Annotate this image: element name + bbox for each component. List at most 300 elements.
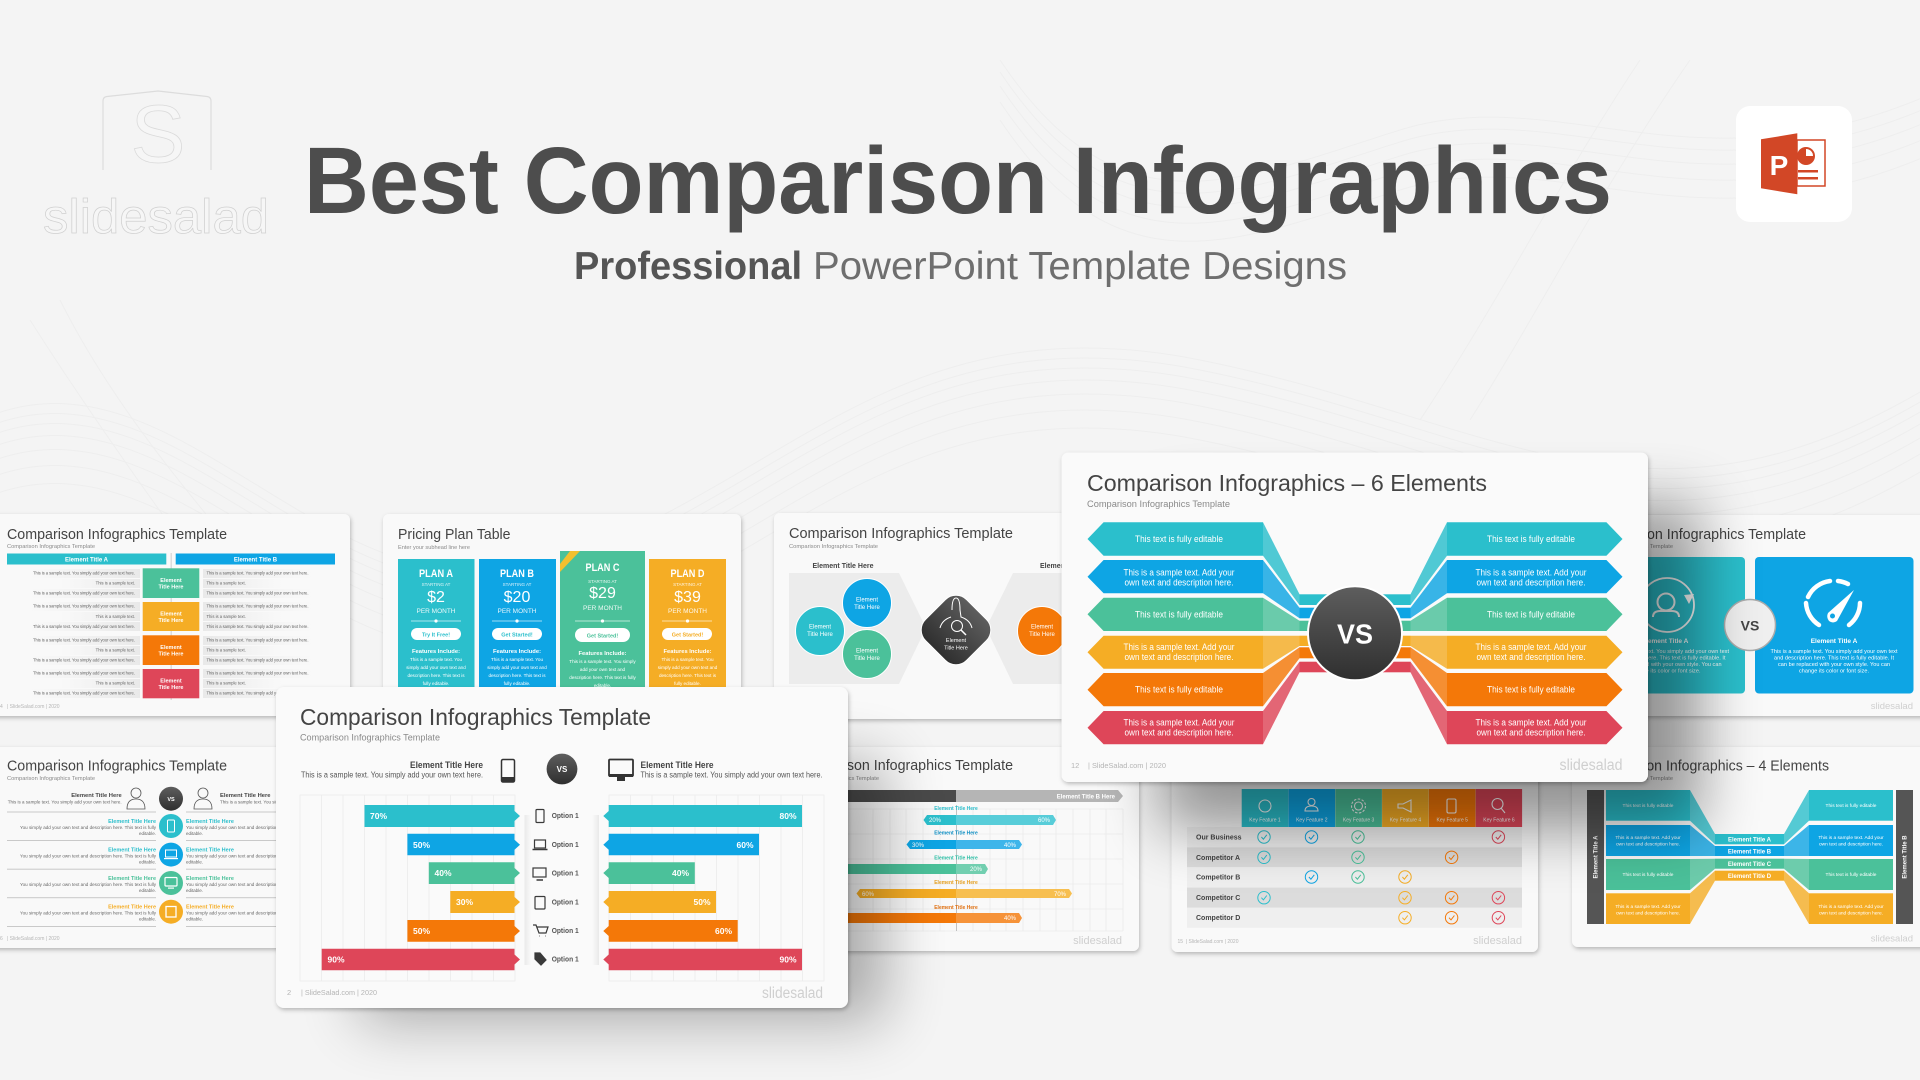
row 4: editable.	[186, 916, 203, 922]
row 1: You simply add your own text and description here. This text is fully	[20, 825, 157, 830]
plan A: Features Include:	[412, 649, 460, 655]
left ribbon text: This text is fully editable	[1135, 534, 1223, 544]
left bars: 30%	[456, 897, 473, 907]
plan B: PLAN B	[500, 568, 534, 580]
VS circle: VS	[1741, 618, 1759, 634]
VS circle: VS	[1337, 618, 1373, 650]
right header	[640, 760, 822, 780]
plan C: $29	[589, 585, 616, 602]
row labels: Competitor A	[1196, 855, 1240, 862]
plan A	[398, 559, 474, 689]
header row: Element Title Here	[220, 793, 271, 799]
center colored boxes: Element	[160, 678, 182, 684]
panel: main bar comparison slide: Comparison Infographics Template	[300, 732, 440, 742]
right text rows: This is a sample text. You simply add your own text here.	[206, 570, 308, 576]
header row: This is a sample text. You simply add your own text here.	[8, 800, 122, 804]
icon: PowerPoint badge: P	[1770, 150, 1788, 181]
row 1: Element Title Here	[186, 819, 234, 825]
shadow of 6 elements slide	[1160, 505, 1700, 830]
right ribbon text: This is a sample text. Add your	[1476, 642, 1586, 652]
right bars: 90%	[779, 954, 797, 964]
column headers: Element Title B	[234, 558, 278, 564]
plan D: This is a sample text. You	[661, 657, 714, 662]
left text rows: This is a sample text. You simply add your own text here.	[33, 590, 135, 596]
row 3: editable.	[139, 888, 156, 893]
plan B: Features Include:	[493, 649, 541, 655]
blue card: change its color or font size.	[1799, 668, 1869, 674]
column headers: Element Title A	[65, 558, 109, 564]
right ribbon text: own text and description here.	[1476, 578, 1586, 588]
row labels	[1196, 834, 1242, 922]
panel: hexagon comparison slide: Element	[809, 624, 831, 630]
right header: This is a sample text. You simply add your own text here.	[640, 770, 822, 780]
bars: Element Title Here	[934, 830, 978, 836]
plan D: Features Include:	[664, 649, 712, 655]
logo: slidesalad	[1560, 757, 1622, 774]
row 2	[20, 843, 323, 867]
row 3: Element Title Here	[186, 876, 234, 882]
panel: hexagon comparison slide: Element	[856, 598, 878, 604]
header row: Element Title Here	[71, 793, 122, 799]
left ribbon text: This is a sample text. Add your	[1124, 718, 1234, 728]
right text rows: This is a sample text. You simply add your own text here.	[206, 658, 308, 662]
row highlights	[30, 569, 313, 698]
title: Best Comparison Infographics	[304, 128, 1612, 234]
plan C: description here. This text is fully	[569, 675, 636, 680]
panel: 6 elements VS slide: | SlideSalad.com | 2020	[1088, 761, 1166, 770]
bars: 70%	[1054, 892, 1067, 898]
ribbon text: own text and description here.	[1616, 842, 1680, 848]
left ribbon text: own text and description here.	[1124, 728, 1234, 738]
plan C	[560, 551, 645, 689]
row labels: Competitor C	[1196, 895, 1240, 902]
panel: timeline bars slide	[700, 747, 1139, 951]
VS circle	[1724, 600, 1776, 650]
center colored boxes: Title Here	[159, 618, 183, 624]
table header: Key Feature 3	[1343, 818, 1375, 824]
plan D: fully editable.	[674, 681, 701, 686]
ribbon text: This text is fully editable	[1623, 872, 1674, 878]
column headers	[7, 554, 335, 564]
ribbon text: This text is fully editable	[1826, 872, 1877, 878]
row 2: editable.	[186, 860, 203, 864]
bars: Element Title Here	[934, 880, 978, 886]
row 1	[20, 814, 323, 838]
dark diamond with person icon: Title Here	[944, 646, 968, 652]
center bands	[1300, 594, 1410, 672]
ribbon text: This is a sample text. Add your	[1818, 835, 1884, 841]
panel: comparison list slide, bottom left: Comparison Infographics Template	[7, 776, 95, 782]
right ribbon text: own text and description here.	[1476, 652, 1586, 662]
right text rows: This is a sample text. You simply add your own text here.	[206, 670, 308, 676]
row 2: Element Title Here	[186, 848, 234, 854]
table header: Key Feature 4	[1390, 818, 1421, 824]
panel: hexagon comparison slide: Element Title Here	[1040, 563, 1101, 570]
row 2: editable.	[139, 860, 156, 864]
panel: hexagon comparison slide: Title Here	[854, 656, 881, 662]
center colored boxes: Title Here	[159, 652, 183, 658]
panel: element table slide, top left	[0, 514, 350, 716]
right ribbon text: This text is fully editable	[1487, 610, 1575, 620]
panel: main bar comparison slide	[276, 687, 848, 1008]
plan B: simply add your own text and	[487, 665, 547, 670]
panel: hexagon comparison slide: Comparison Infographics Template	[789, 544, 878, 550]
bars: 40%	[1004, 916, 1017, 922]
icon: gauge	[1806, 581, 1860, 625]
center colored boxes: Element	[160, 645, 182, 651]
panel: 6 elements VS slide: Comparison Infographics Template	[1087, 499, 1230, 509]
blue card: Element Title A	[1811, 638, 1858, 645]
header row: This is a sample text. You simply add your own text here.	[220, 800, 333, 804]
left text rows: This is a sample text.	[96, 648, 135, 652]
heading: Comparison Infographics Template	[789, 526, 1013, 542]
row 2: You simply add your own text and description here. This text is fully	[186, 854, 323, 858]
left text rows: This is a sample text. You simply add your own text here.	[33, 624, 135, 629]
plan C: PLAN C	[586, 562, 620, 574]
plan C: editable.	[594, 683, 611, 688]
ribbon text: This is a sample text. Add your	[1818, 904, 1884, 910]
left text rows: This is a sample text. You simply add your own text here.	[33, 570, 135, 576]
option labels: Option 1	[552, 840, 579, 849]
bars	[800, 806, 1072, 923]
right text rows	[206, 570, 308, 696]
plan C: PER MONTH	[583, 605, 622, 612]
icon: PowerPoint badge	[1736, 106, 1852, 222]
ribbons	[1606, 790, 1893, 924]
option labels: Option 1	[552, 926, 579, 935]
right bars	[603, 805, 802, 970]
option icons	[532, 810, 548, 965]
wordmark: slidesalad	[43, 191, 269, 244]
circles	[796, 578, 1066, 678]
row 1: editable.	[186, 831, 203, 836]
bars: 60%	[1038, 818, 1051, 824]
left bars: 50%	[413, 926, 430, 936]
icon: monitor	[609, 760, 633, 781]
plan A: $2	[427, 589, 445, 606]
footer: 15 | SlideSalad.com | 2020	[1178, 939, 1239, 945]
left ribbon text: This is a sample text. Add your	[1124, 568, 1234, 578]
ribbon text: own text and description here.	[1819, 910, 1883, 916]
panel: main bar comparison slide: | SlideSalad.com | 2020	[301, 988, 377, 997]
left bars: 50%	[413, 840, 430, 850]
left ribbon text	[1124, 534, 1234, 738]
left header: Element Title Here	[410, 760, 483, 770]
left text rows: This is a sample text. You simply add your own text here.	[33, 604, 135, 608]
icon: shield with S: S	[131, 89, 185, 180]
side bars: Element Title A	[1594, 835, 1600, 879]
row labels: Competitor D	[1196, 915, 1240, 922]
plan D	[649, 559, 726, 689]
chart grids	[300, 795, 824, 981]
plan D: STARTING AT	[673, 582, 702, 587]
ribbon text: This text is fully editable	[1623, 803, 1674, 809]
VS circle	[1308, 586, 1402, 680]
VS circle	[547, 754, 577, 784]
panel: hexagon comparison slide: Title Here	[1029, 632, 1056, 638]
plan A: PER MONTH	[416, 608, 456, 615]
footer: 12	[1071, 761, 1079, 770]
grid	[848, 809, 1123, 931]
bars: Element Title Here	[934, 905, 978, 911]
icon: phone	[502, 760, 514, 782]
row 4: editable.	[139, 916, 156, 922]
row 1: You simply add your own text and description here. This text is fully	[186, 825, 323, 830]
plan A: description here. This text is	[407, 673, 465, 678]
connector wedges left	[1263, 522, 1300, 744]
plan A: This is a sample text. You	[410, 657, 462, 662]
right bars: 50%	[693, 897, 711, 907]
left ribbon text: This text is fully editable	[1135, 610, 1223, 620]
panel: hexagon comparison slide: Element Title Here	[813, 563, 874, 570]
right bars: 60%	[715, 926, 732, 936]
footer: 2	[287, 988, 291, 997]
panel: hexagon comparison slide: Title Here	[807, 632, 834, 638]
row 2: You simply add your own text and description here. This text is fully	[20, 854, 157, 858]
right ribbon text: This is a sample text. Add your	[1476, 568, 1586, 578]
row 4: Element Title Here	[108, 904, 156, 910]
left header	[301, 760, 483, 780]
plan D: Get Started!	[672, 632, 703, 638]
ribbon text: This is a sample text. Add your	[1615, 835, 1681, 841]
option labels: Option 1	[552, 954, 579, 964]
option labels: Option 1	[552, 811, 579, 820]
plan B: description here. This text is	[488, 673, 546, 678]
ribbon text	[1615, 803, 1884, 916]
ribbon text: This is a sample text. Add your	[1615, 904, 1681, 910]
right text rows: This is a sample text.	[206, 580, 246, 586]
panel: timeline bars slide: Comparison Infographics Template	[791, 776, 879, 782]
table header: Key Feature 2	[1296, 818, 1328, 824]
right text rows: This is a sample text. You simply add your own text here.	[206, 690, 308, 696]
row labels: Our Business	[1196, 834, 1242, 842]
left ribbons	[1088, 522, 1263, 744]
heading: Comparison Infographics – 4 Elements	[1586, 759, 1829, 775]
plan B	[479, 559, 556, 689]
row 1: Element Title Here	[108, 819, 156, 825]
bars: 60%	[862, 892, 875, 898]
plan B: STARTING AT	[503, 582, 532, 587]
grey hexagons	[789, 573, 1100, 684]
row 3	[20, 871, 323, 895]
plan B: PER MONTH	[498, 608, 537, 615]
panel: hexagon comparison slide	[774, 513, 1114, 719]
right ribbon text: own text and description here.	[1476, 728, 1586, 738]
side bars	[1587, 790, 1913, 924]
heading: Comparison Infographics Template	[7, 527, 227, 543]
row 3: You simply add your own text and description here. This text is fully	[20, 882, 157, 887]
footer: 4 | SlideSalad.com | 2020	[0, 704, 60, 710]
panel: feature table slide	[1172, 600, 1538, 952]
heading: Pricing Plan Table	[398, 527, 510, 543]
option labels: Option 1	[552, 898, 579, 906]
left header: This is a sample text. You simply add your own text here.	[301, 770, 483, 780]
divider lines	[7, 812, 286, 927]
row 1: editable.	[139, 831, 156, 836]
plan B: $20	[504, 589, 530, 606]
right ribbon text: This is a sample text. Add your	[1476, 718, 1586, 728]
plan D: PLAN D	[670, 568, 705, 580]
left bars: 70%	[370, 811, 387, 821]
ribbon text: Element Title B	[1728, 850, 1772, 856]
panel: hexagon comparison slide: Element	[856, 648, 878, 654]
panel: VS cards slide, top right: Comparison Infographics Template	[1585, 544, 1673, 550]
row 3: You simply add your own text and description here. This text is fully	[186, 882, 323, 887]
logo: slidesalad	[1871, 701, 1913, 712]
heading: Comparison Infographics Template	[1586, 527, 1806, 543]
plan C: This is a sample text. You simply	[569, 659, 636, 664]
table rows	[1187, 827, 1522, 928]
center column shading	[524, 815, 599, 965]
left bars	[322, 805, 520, 970]
left text rows: This is a sample text.	[96, 614, 135, 619]
plan B: This is a sample text. You	[491, 657, 543, 662]
bars: 30%	[912, 843, 925, 849]
teal card	[1587, 557, 1745, 694]
heading: Comparison Infographics Template	[300, 704, 651, 730]
plan C: Get Started!	[587, 634, 618, 640]
teal card: Element Title A	[1642, 638, 1689, 645]
right bars: 60%	[736, 840, 754, 850]
left ribbon text: own text and description here.	[1124, 652, 1234, 662]
center colored boxes: Element	[160, 612, 182, 618]
ribbon text: This text is fully editable	[1826, 803, 1877, 809]
right ribbon text	[1476, 534, 1586, 738]
header bar: Element Title B Here	[1057, 794, 1116, 800]
side bars: Element Title B	[1902, 835, 1908, 879]
center colored boxes: Element	[160, 578, 182, 584]
plan D: PER MONTH	[668, 608, 707, 615]
teal card: can be replaced with your own style. You can	[1610, 662, 1722, 668]
plan A: STARTING AT	[422, 582, 451, 587]
right text rows: This is a sample text. You simply add your own text here.	[206, 604, 308, 608]
row 4: Element Title Here	[186, 904, 234, 910]
panel: comparison list slide, bottom left	[0, 747, 333, 948]
left text rows: This is a sample text. You simply add your own text here.	[33, 690, 135, 696]
header row: VS	[167, 797, 175, 803]
panel: hexagon comparison slide: Title Here	[854, 605, 881, 611]
logo: slidesalad	[1871, 934, 1913, 945]
teal card: change its color or font size.	[1630, 668, 1701, 674]
ribbon text: Element Title C	[1728, 862, 1772, 868]
teal card: This is a sample text. You simply add your own text	[1602, 649, 1729, 655]
logo: slidesalad	[762, 985, 823, 1002]
row 3: Element Title Here	[108, 876, 156, 882]
row 4: You simply add your own text and description here. This text is fully	[20, 910, 157, 916]
subtitle: PowerPoint Template Designs	[813, 245, 1347, 288]
row 4: You simply add your own text and description here. This text is fully	[186, 910, 323, 916]
left ribbon text: This is a sample text. Add your	[1124, 642, 1234, 652]
teal card: and description here. This text is fully editable. It	[1606, 656, 1726, 662]
panel: element table slide, top left: Comparison Infographics Template	[7, 544, 95, 550]
bars: Element Title Here	[934, 806, 978, 812]
plan B: fully editable.	[504, 681, 530, 686]
left text rows: This is a sample text.	[96, 580, 135, 586]
plan A: Try It Free!	[422, 632, 450, 638]
left text rows	[33, 570, 135, 696]
left text rows: This is a sample text. You simply add your own text here.	[33, 658, 135, 662]
center colored boxes: Title Here	[159, 685, 183, 691]
check marks	[1258, 831, 1505, 924]
panel: 6 elements VS slide	[1062, 452, 1648, 782]
bars: 20%	[929, 818, 942, 824]
plan A: simply add your own text and	[406, 665, 466, 670]
right text rows: This is a sample text. You simply add your own text here.	[206, 624, 308, 629]
bars: 20%	[970, 867, 983, 873]
table header: Key Feature 6	[1483, 818, 1515, 824]
blue card: and description here. This text is fully editable. It	[1774, 656, 1894, 662]
heading: Comparison Infographics – 6 Elements	[1087, 470, 1487, 496]
table header: Key Feature 5	[1436, 818, 1468, 824]
right header: Element Title Here	[640, 760, 714, 770]
left ribbon text: This text is fully editable	[1135, 684, 1223, 694]
plan D: simply add your own text and	[658, 665, 718, 670]
option labels	[552, 811, 579, 964]
panel: pricing plan table slide	[383, 514, 741, 714]
dark diamond with person icon: Element	[946, 638, 967, 644]
plan C: add your own text and	[580, 667, 626, 672]
bars: Element Title Here	[934, 856, 978, 862]
row 4	[20, 900, 323, 924]
plan D: $39	[674, 589, 701, 606]
right bars: 40%	[672, 868, 689, 878]
blue card	[1755, 557, 1914, 694]
shadow of main slide	[360, 760, 885, 1022]
logo: slidesalad	[1473, 935, 1522, 947]
right text rows: This is a sample text.	[206, 680, 246, 686]
right ribbon text: This text is fully editable	[1487, 684, 1575, 694]
option labels: Option 1	[552, 868, 579, 878]
center colored boxes	[143, 568, 199, 698]
panel: pricing plan table slide: Enter your subhead line here	[398, 545, 470, 551]
right text rows: This is a sample text.	[206, 648, 246, 652]
right text rows: This is a sample text. You simply add your own text here.	[206, 638, 308, 642]
icon: shield with S	[103, 89, 211, 180]
bars: 40%	[1004, 843, 1017, 849]
ribbon text: Element Title A	[1728, 838, 1772, 844]
blue card: can be replaced with your own style. You can	[1778, 662, 1890, 668]
row 3: editable.	[186, 888, 203, 893]
header row	[8, 787, 333, 811]
ribbon text: Element Title D	[1728, 874, 1772, 880]
row labels: Competitor B	[1196, 874, 1240, 882]
ribbon text: own text and description here.	[1616, 910, 1680, 916]
plan C: Features Include:	[578, 651, 627, 657]
right bars: 80%	[779, 811, 797, 821]
heading: Comparison Infographics Template	[793, 758, 1013, 774]
left text rows: This is a sample text. You simply add your own text here.	[33, 638, 135, 642]
right ribbon text: This text is fully editable	[1487, 534, 1575, 544]
heading: Comparison Infographics Template	[7, 759, 227, 775]
panel: 4 elements slide	[1572, 747, 1920, 947]
left text rows: This is a sample text.	[96, 680, 135, 686]
right text rows: This is a sample text. You simply add your own text here.	[206, 590, 308, 596]
table header	[1242, 789, 1522, 827]
subtitle: Professional	[574, 245, 802, 288]
dark diamond with person icon	[915, 589, 997, 671]
table header: Key Feature 1	[1249, 818, 1281, 824]
plan A: PLAN A	[419, 568, 453, 580]
right ribbons	[1447, 522, 1622, 744]
header bar	[800, 790, 1123, 802]
plan D: description here. This text is	[659, 673, 717, 678]
logo: slidesalad	[1073, 935, 1122, 947]
plan C: STARTING AT	[588, 579, 617, 584]
left bars: 90%	[328, 954, 345, 964]
left ribbon text: own text and description here.	[1124, 578, 1234, 588]
blue card: This is a sample text. You simply add your own text	[1770, 649, 1898, 655]
logo: slidesalad embossed	[43, 89, 269, 244]
